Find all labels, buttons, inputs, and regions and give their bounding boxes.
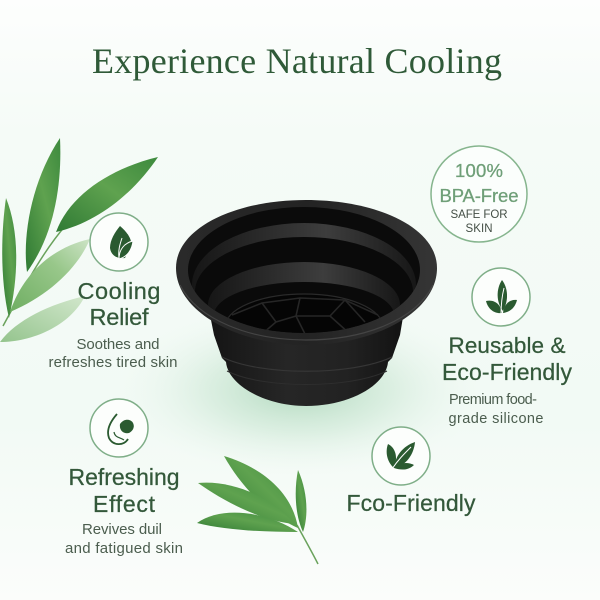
bowl — [176, 200, 437, 406]
leaves: bottom sprig — [197, 456, 318, 564]
heading: refreshing effect: Effect — [93, 491, 156, 517]
icon: cooling relief — [90, 213, 148, 271]
heading: eco-friendly: Fco-Friendly — [346, 490, 476, 516]
title: Experience Natural Cooling — [92, 41, 502, 81]
heading: cooling relief — [78, 278, 160, 330]
badge: 100% BPA-free: BPA-Free — [440, 185, 518, 206]
badge: 100% BPA-free: 100% — [455, 160, 503, 181]
bowl shadow glow — [115, 305, 485, 475]
heading: cooling relief: Cooling — [78, 278, 160, 304]
badge: 100% BPA-free: SKIN — [466, 223, 492, 235]
heading: reusable and eco-friendly: Reusable & — [448, 333, 566, 358]
heading: reusable and eco-friendly: Eco-Friendly — [442, 359, 572, 385]
icon: eco-friendly leaves — [372, 427, 430, 485]
text: reusable description: grade silicone — [448, 411, 544, 427]
heading: refreshing effect: Refreshing — [68, 464, 180, 490]
text: cooling relief description: Soothes and — [76, 336, 160, 353]
icon: reusable sprout — [472, 268, 530, 326]
text: refreshing description: Revives duil — [82, 521, 162, 538]
text: refreshing description: and fatigued skin — [65, 540, 183, 557]
icon: refreshing drop — [90, 399, 148, 457]
heading: refreshing effect — [68, 464, 180, 517]
text: reusable description — [448, 392, 544, 427]
heading: reusable and eco-friendly — [442, 333, 572, 385]
badge: 100% BPA-free — [431, 146, 527, 242]
leaves: top-left branch — [0, 138, 158, 342]
text: reusable description: Premium food- — [449, 392, 537, 408]
text: cooling relief description — [48, 336, 178, 371]
heading: cooling relief: Relief — [90, 304, 149, 330]
text: refreshing description — [65, 521, 183, 557]
text: cooling relief description: refreshes tired skin — [48, 354, 178, 371]
badge: 100% BPA-free: SAFE FOR — [450, 209, 508, 221]
